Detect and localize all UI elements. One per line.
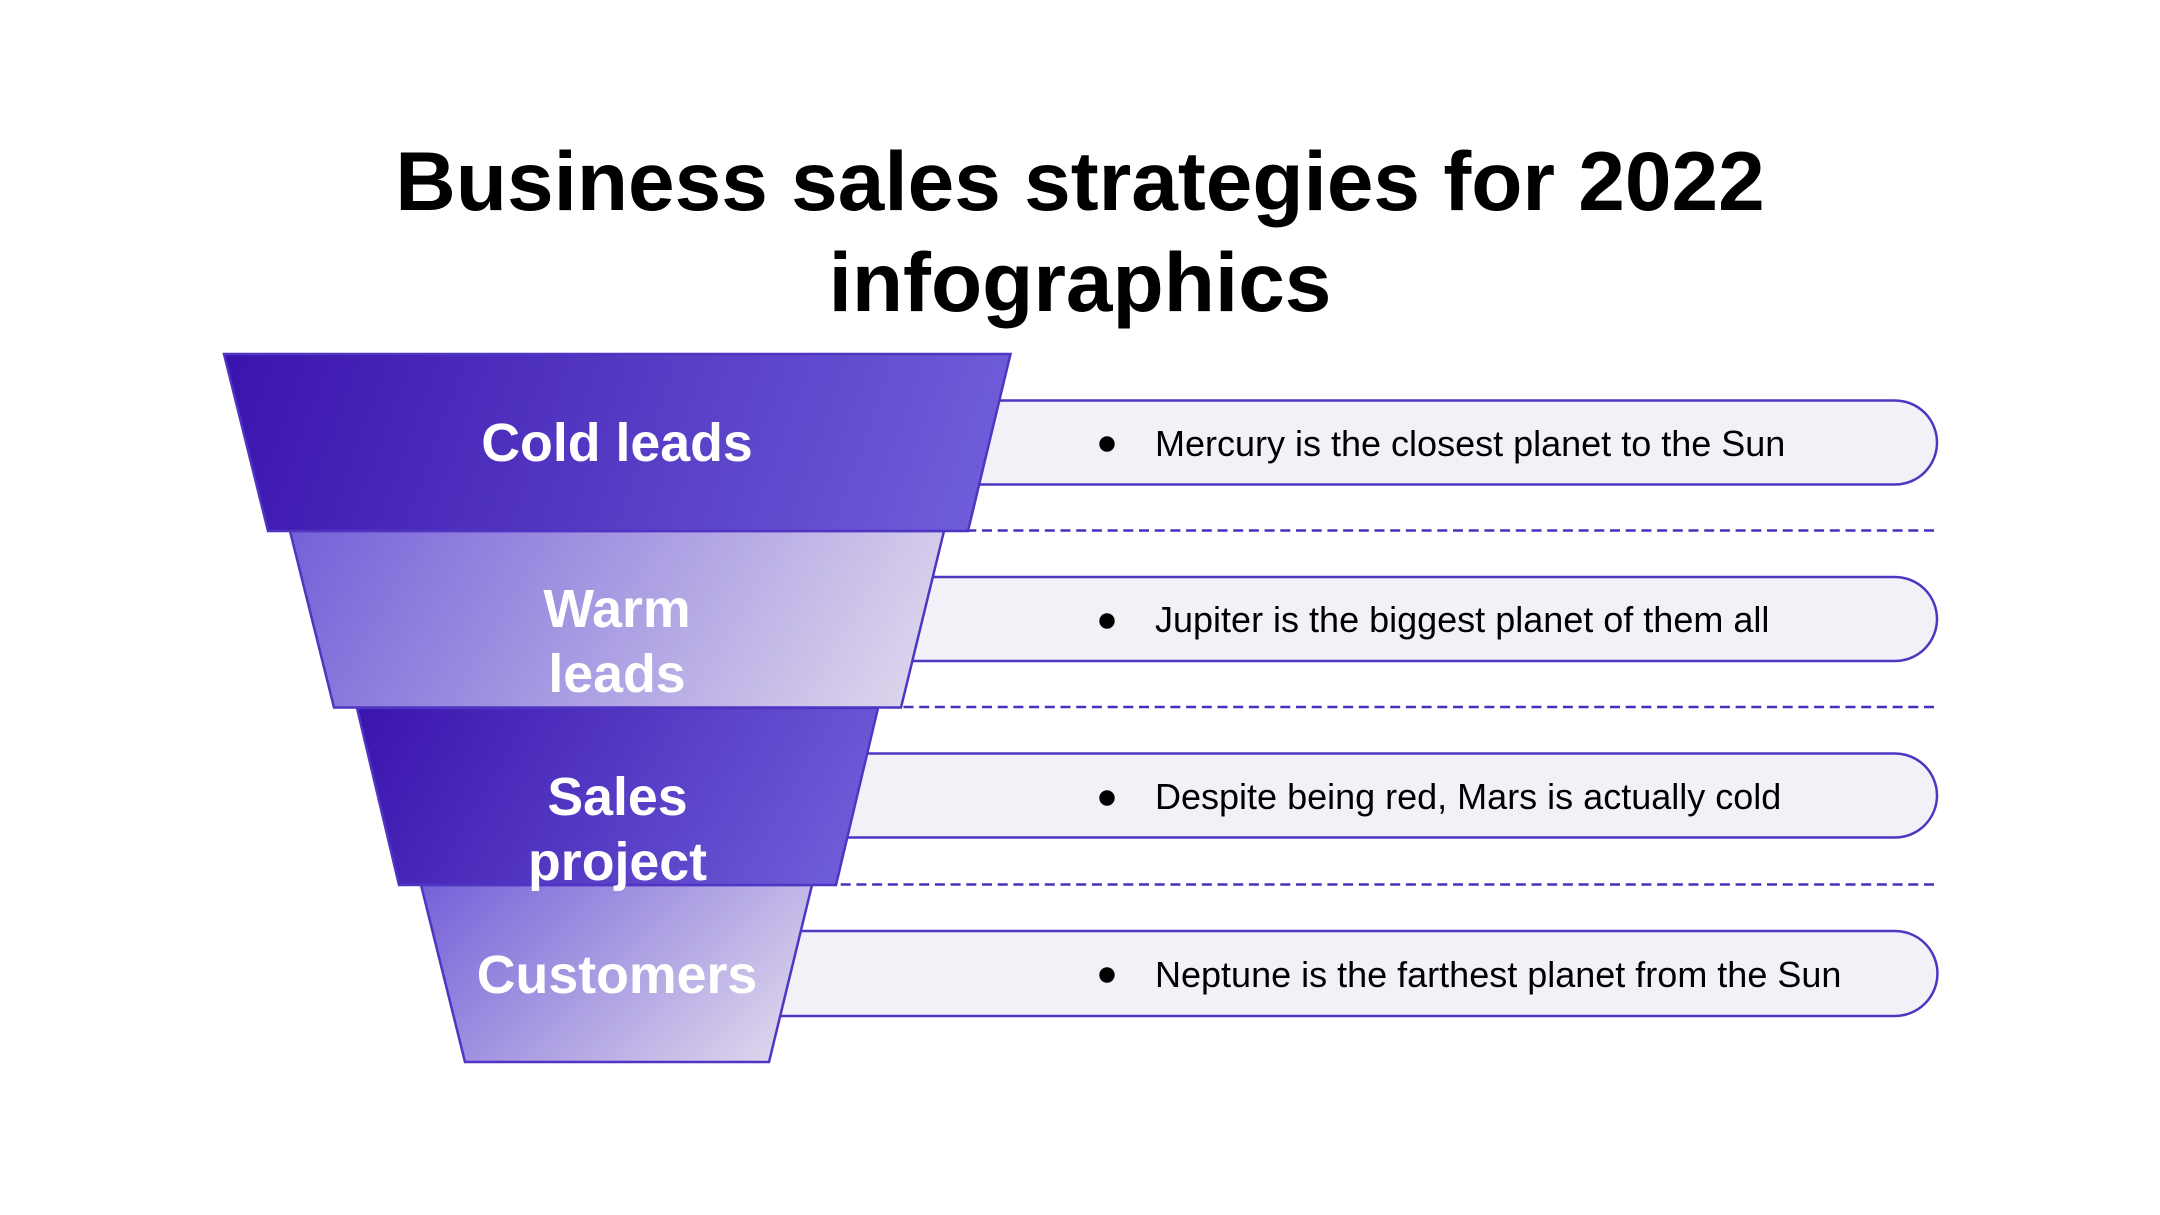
funnel tier: Cold leads: Cold leads xyxy=(481,413,753,473)
description pill: Mercury: Mercury is the closest planet to the Sun xyxy=(1155,423,1785,464)
funnel tier: Cold leads xyxy=(224,354,1010,531)
description pill: Jupiter: Jupiter is the biggest planet of them all xyxy=(1155,599,1769,640)
description pill: Mercury xyxy=(900,400,1937,484)
description pill: Neptune: Neptune is the farthest planet from the Sun xyxy=(1155,954,1841,995)
description pill: Jupiter xyxy=(800,577,1937,661)
funnel tier: Customers: Customers xyxy=(477,945,757,1005)
funnel tier: Sales project: project xyxy=(528,832,707,892)
funnel chart xyxy=(224,354,1010,1062)
funnel tier: Warm leads: leads xyxy=(548,644,686,704)
description pill: Mars xyxy=(750,754,1937,838)
funnel tier: Customers xyxy=(421,885,812,1062)
funnel tier: Warm leads: Warm xyxy=(543,579,691,639)
funnel tier: Sales project: Sales xyxy=(547,767,688,827)
title: infographics xyxy=(829,235,1331,329)
funnel tier: Warm leads xyxy=(290,531,944,708)
description pill: Mars: Despite being red, Mars is actually cold xyxy=(1155,776,1781,817)
funnel tier: Sales project xyxy=(357,708,878,892)
description pill: Neptune xyxy=(700,931,1937,1016)
title: Business sales strategies for 2022 xyxy=(395,134,1765,228)
